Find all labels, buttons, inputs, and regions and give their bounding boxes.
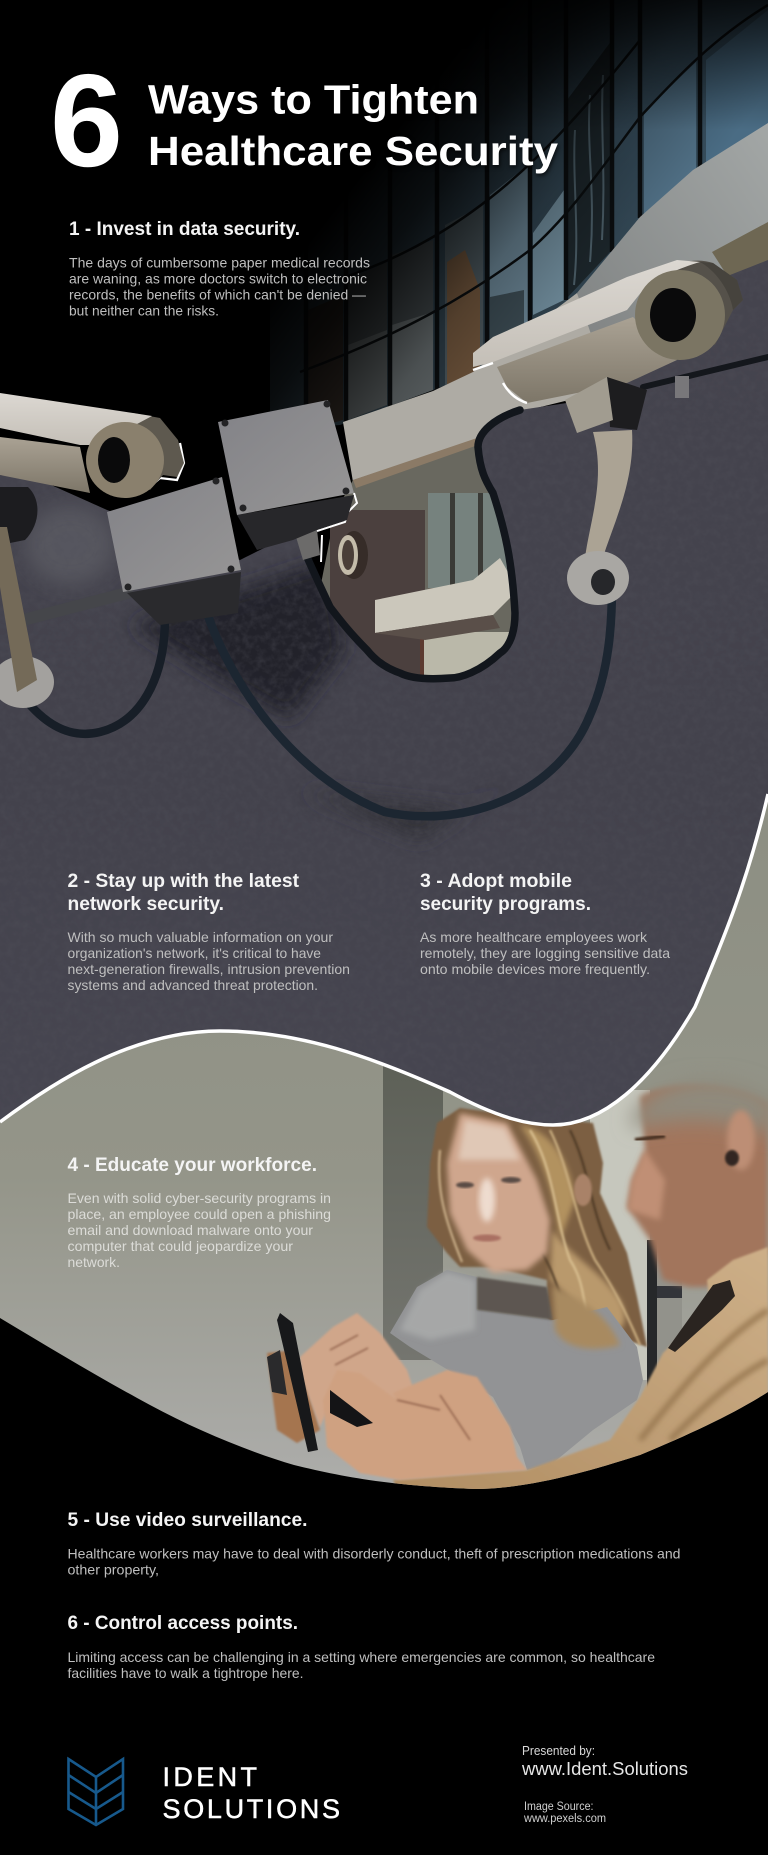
presented by credit: Presented by: xyxy=(522,1743,595,1758)
section 3: As more healthcare employees work xyxy=(420,929,648,945)
section 4: computer that could jeopardize your xyxy=(68,1238,293,1254)
presented by credit xyxy=(521,1743,688,1779)
darkness gradient over the windows xyxy=(260,0,768,440)
section 4: 4 - Educate your workforce. xyxy=(68,1154,317,1176)
concrete wall shape with white edge xyxy=(0,230,768,1150)
section 2: 2 - Stay up with the latest xyxy=(68,870,299,892)
section 2: network security. xyxy=(68,893,224,915)
section 5 xyxy=(68,1509,680,1578)
presented by credit: www.Ident.Solutions xyxy=(521,1759,688,1779)
section 3: 3 - Adopt mobile xyxy=(420,870,572,892)
section 1: are waning, as more doctors switch to electronic xyxy=(69,270,367,286)
image source credit: Image Source: xyxy=(524,1801,594,1813)
section 6: Limiting access can be challenging in a setting where emergencies are common, so healthcare xyxy=(68,1649,655,1665)
left wall bracket xyxy=(0,487,54,708)
photo: glass building behind cameras xyxy=(260,0,768,690)
image source credit xyxy=(523,1801,606,1825)
security camera right xyxy=(473,260,743,605)
section 6: 6 - Control access points. xyxy=(68,1612,298,1634)
section 3: security programs. xyxy=(420,893,591,915)
cables xyxy=(23,357,768,816)
logo wordmark: SOLUTIONS xyxy=(162,1794,340,1824)
section 4: network. xyxy=(68,1254,120,1270)
section 5: other property, xyxy=(68,1562,159,1578)
logo wordmark: IDENT xyxy=(162,1762,257,1792)
section 3: onto mobile devices more frequently. xyxy=(420,961,650,977)
title xyxy=(50,47,558,194)
window mullions xyxy=(300,0,768,430)
section 3: remotely, they are logging sensitive data xyxy=(420,945,670,961)
section 1: 1 - Invest in data security. xyxy=(69,218,300,240)
hair strands xyxy=(439,1130,640,1345)
window panes xyxy=(308,10,768,430)
section 4 xyxy=(68,1154,331,1270)
woman's hair xyxy=(427,1108,647,1353)
section 4: Even with solid cyber-security programs in xyxy=(68,1190,331,1206)
connector and white cut-out edge xyxy=(293,493,357,562)
lower building seen through the cable loop xyxy=(300,410,530,690)
photo: colleagues with a phone xyxy=(0,780,768,1500)
junction box right xyxy=(218,400,354,550)
section 1: records, the benefits of which can't be denied — xyxy=(69,287,366,303)
section 2: systems and advanced threat protection. xyxy=(68,977,318,993)
section 4: email and download malware onto your xyxy=(68,1222,313,1238)
logo wordmark xyxy=(162,1762,340,1824)
title: Healthcare Security xyxy=(148,128,558,174)
man's head xyxy=(627,1085,768,1287)
image source credit: www.pexels.com xyxy=(523,1813,606,1825)
junction box left xyxy=(107,477,241,625)
man's shirt xyxy=(393,1247,768,1500)
section 5: Healthcare workers may have to deal with disorderly conduct, theft of prescription medications and xyxy=(68,1546,680,1562)
section 2 xyxy=(68,870,350,993)
woman's face xyxy=(447,1113,550,1273)
section 3 xyxy=(420,870,670,977)
title: Ways to Tighten xyxy=(148,76,479,122)
security camera left xyxy=(0,393,184,498)
sweater xyxy=(390,1270,643,1470)
concrete facade band xyxy=(577,123,768,400)
section 1 xyxy=(69,218,370,318)
room walls xyxy=(0,780,768,1500)
hands and phones xyxy=(267,1350,320,1443)
section 5: 5 - Use video surveillance. xyxy=(68,1509,308,1531)
section 2: next-generation firewalls, intrusion prevention xyxy=(68,961,350,977)
section 1: The days of cumbersome paper medical records xyxy=(69,255,370,271)
section 1: but neither can the risks. xyxy=(69,302,219,318)
section 6 xyxy=(68,1612,655,1681)
section 4: place, an employee could open a phishing xyxy=(68,1206,331,1222)
icon: Ident Solutions logo mark xyxy=(68,1759,123,1825)
section 2: organization's network, it's critical to have xyxy=(68,945,321,961)
section 6: facilities have to walk a tightrope here. xyxy=(68,1665,304,1681)
title: 6 xyxy=(50,47,123,194)
camera mount xyxy=(607,377,647,430)
section 2: With so much valuable information on your xyxy=(68,929,333,945)
